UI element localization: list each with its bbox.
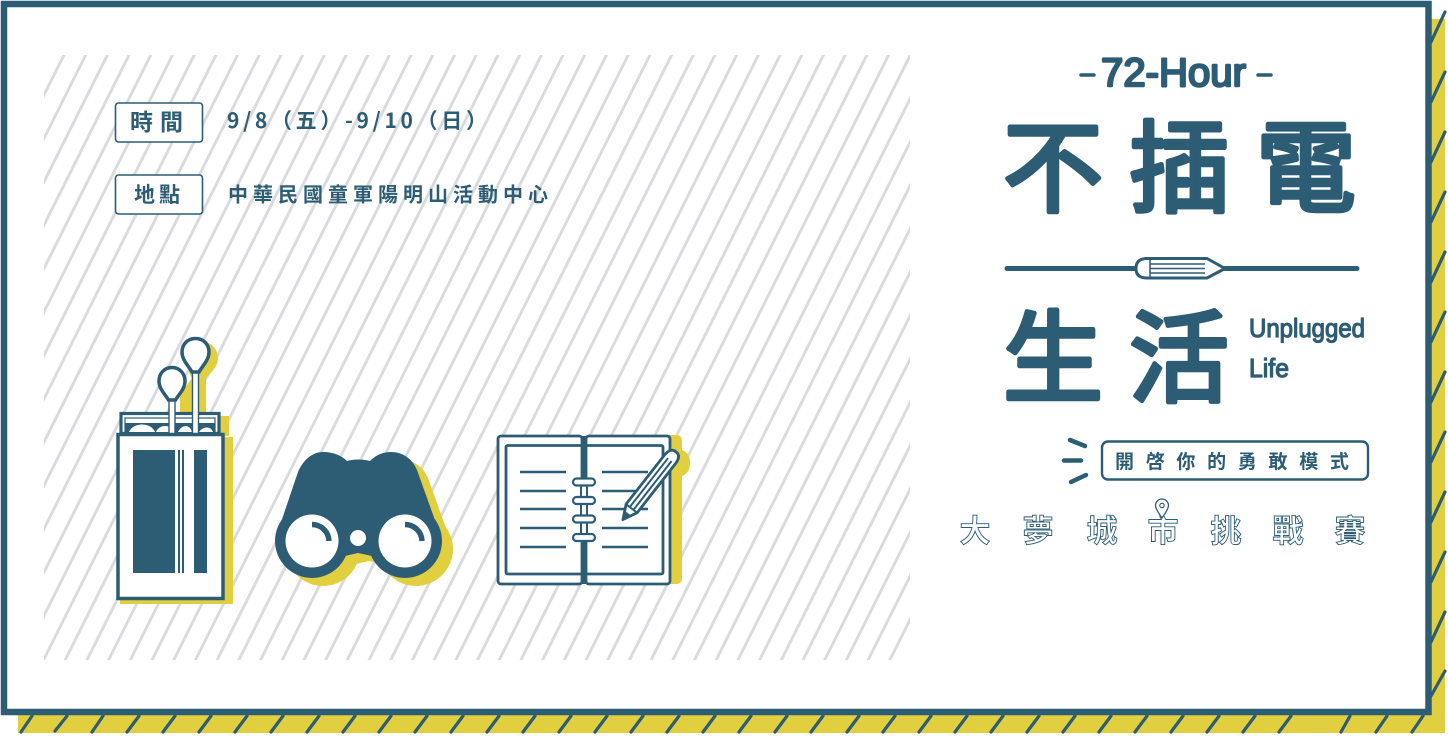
binoculars body [275, 452, 442, 578]
divider: pencil line [1007, 258, 1357, 278]
event name: outlined characters: 城 [1086, 506, 1118, 551]
icon: map pin [1156, 499, 1168, 518]
match sticks [159, 338, 209, 434]
time label [116, 103, 202, 142]
event name: outlined characters: 賽 [1334, 506, 1366, 551]
title: 生活: 生 [1003, 278, 1103, 423]
title: 不插電: 不 [1003, 88, 1103, 233]
box front [118, 434, 223, 598]
event name: outlined characters [960, 506, 1366, 551]
match shadows [120, 342, 233, 604]
title: 不插電: 電 [1256, 88, 1356, 233]
time label: 時間 [130, 103, 190, 137]
event name: outlined characters: 市 [1148, 506, 1178, 551]
location label: 地點 [134, 179, 184, 209]
heading: 72-Hour: 72-Hour [1101, 51, 1246, 95]
notebook shadow [660, 435, 690, 584]
icon: matchbox [118, 338, 233, 604]
tagline badge: 開啓你的勇敢模式 [1115, 447, 1361, 474]
tagline badge [1102, 442, 1368, 480]
event name: outlined characters: 大 [960, 506, 990, 551]
icon: emphasis rays [1064, 440, 1086, 482]
binoculars shadow [286, 460, 453, 586]
location text: 中華民國童軍陽明山活動中心 [228, 178, 553, 208]
pencil [617, 447, 681, 524]
date text: 9/8（五）-9/10（日） [227, 105, 487, 135]
notebook pages [498, 436, 670, 584]
event name: outlined characters: 夢 [1022, 506, 1054, 551]
notebook rings [573, 478, 595, 541]
subtitle: Unplugged Life: Life [1249, 353, 1289, 383]
title: 不插電: 插 [1129, 88, 1229, 233]
subtitle: Unplugged Life: Unplugged [1249, 313, 1365, 343]
icon: binoculars [275, 452, 453, 586]
panel: diagonal stripe background [44, 55, 910, 660]
title: 生活 [1003, 278, 1229, 423]
subtitle: Unplugged Life [1249, 313, 1365, 383]
notebook lines [520, 472, 648, 547]
event name: outlined characters: 挑 [1210, 506, 1242, 551]
event name: outlined characters: 戰 [1272, 506, 1304, 551]
location label [116, 175, 202, 214]
title: 生活: 活 [1129, 278, 1229, 423]
title: 不插電 [1003, 88, 1356, 233]
icon: notebook and pencil [498, 435, 690, 584]
tray [121, 414, 219, 434]
